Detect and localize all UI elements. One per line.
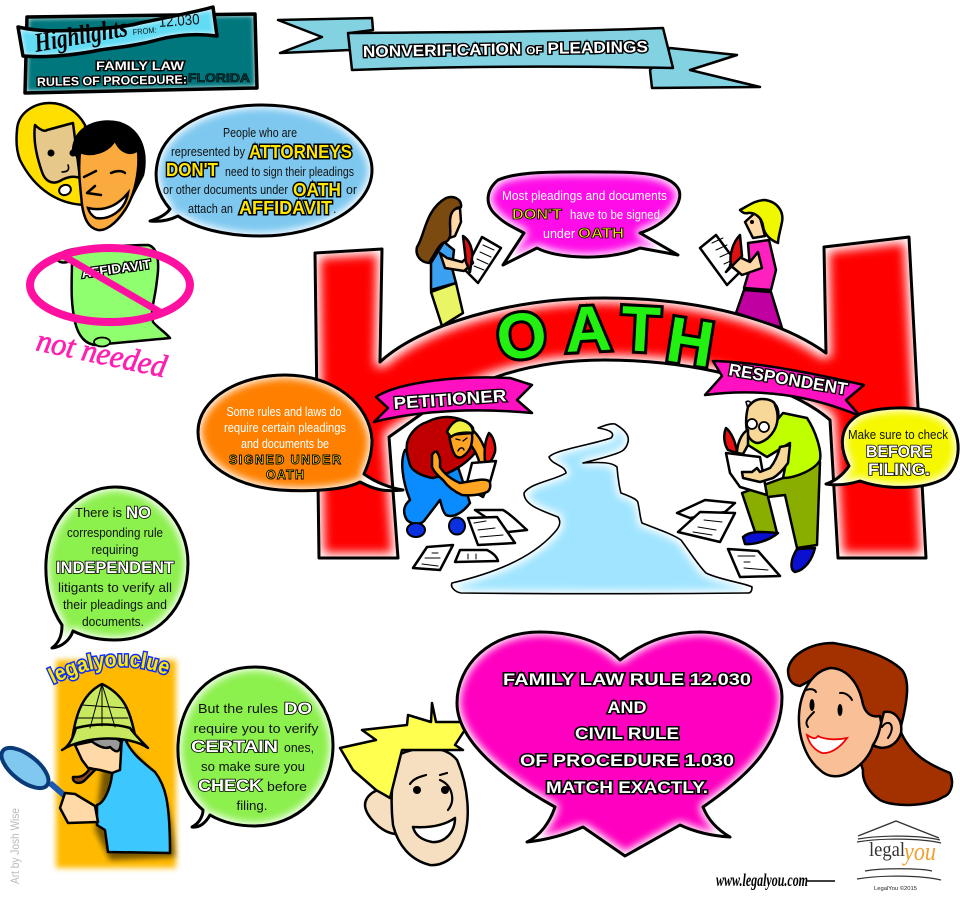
subtitle: FAMILY LAW xyxy=(96,59,185,73)
from label: FROM: xyxy=(132,26,157,37)
bubble text xyxy=(224,405,346,482)
bubble text: require certain pleadings xyxy=(224,421,346,435)
front arm xyxy=(432,451,490,495)
left woman with paper and quill xyxy=(417,197,501,326)
glasses xyxy=(747,419,757,429)
bubble text: Make sure to check xyxy=(848,428,949,442)
bubble text: But the rules xyxy=(198,702,278,716)
ear xyxy=(365,790,397,834)
eyes, nose, mouth xyxy=(413,786,421,794)
logo xyxy=(857,821,941,892)
heart callout xyxy=(457,632,782,856)
bubble text: ATTORNEYS xyxy=(249,142,352,162)
title text: NONVERIFICATION OF PLEADINGS xyxy=(363,39,648,61)
heart text: MATCH EXACTLY. xyxy=(546,778,708,797)
quill xyxy=(485,433,495,463)
bubble text: DON'T xyxy=(166,160,218,180)
bubble text: CHECK xyxy=(198,776,263,795)
bubble text: under xyxy=(543,227,575,241)
OATH arch lettering: OATH xyxy=(492,292,719,381)
bubble text: have to be signed xyxy=(570,208,660,222)
no sign ring xyxy=(30,248,190,322)
back arm xyxy=(737,430,748,454)
trousers xyxy=(742,462,820,548)
bubble text: DON'T xyxy=(512,206,562,223)
hair xyxy=(447,420,473,437)
bubble text: require you to verify xyxy=(194,722,319,736)
petitioner label: PETITIONER xyxy=(393,386,507,413)
respondent stooping with papers xyxy=(724,399,820,572)
center band xyxy=(348,28,673,70)
bubble text: NO xyxy=(126,503,151,522)
man head xyxy=(73,121,144,230)
ear xyxy=(873,712,901,748)
bubble text: corresponding rule xyxy=(67,526,163,540)
bubble text: SIGNED UNDER xyxy=(229,453,341,467)
sideburns xyxy=(746,401,779,425)
icon: crossed-out affidavit scroll xyxy=(30,245,190,384)
bubble text: AFFIDAVIT xyxy=(239,198,332,218)
shoes xyxy=(407,523,425,537)
shirt xyxy=(747,413,820,478)
bubble text: or xyxy=(346,183,357,197)
bubble text: INDEPENDENT xyxy=(56,558,175,577)
bubble text: their pleadings and xyxy=(63,598,167,612)
bubble text: Most pleadings and documents xyxy=(502,189,667,203)
right woman with paper and quill xyxy=(700,200,782,328)
base lines xyxy=(857,869,941,880)
paper xyxy=(726,453,767,495)
speech bubble: attorneys xyxy=(150,105,372,236)
coat xyxy=(97,735,170,853)
bubble text xyxy=(191,699,319,813)
scroll xyxy=(57,245,170,345)
bubble text: ones, xyxy=(284,741,314,755)
face xyxy=(75,735,122,773)
heart text: AND xyxy=(608,698,646,717)
right tail xyxy=(650,48,760,88)
quill xyxy=(724,428,737,453)
bubble text: litigants to verify all xyxy=(58,581,172,595)
not needed: not needed xyxy=(34,322,171,384)
shoes xyxy=(743,532,778,544)
bubble text: documents. xyxy=(82,615,144,629)
pipe xyxy=(73,768,95,783)
affidavit label: AFFIDAVIT xyxy=(80,256,152,281)
bubble text: People who are xyxy=(223,126,297,140)
website: www.legalyou.com xyxy=(716,870,808,890)
hand xyxy=(60,793,98,823)
Highlights script: Highlights xyxy=(31,12,130,58)
hair xyxy=(788,643,952,805)
art credit: Art by Josh Wise xyxy=(8,808,22,884)
bubble text: or other documents under xyxy=(163,183,288,197)
bubble text: Some rules and laws do xyxy=(226,405,342,419)
petitioner ribbon xyxy=(374,377,532,422)
magnifier xyxy=(0,741,72,802)
you: you xyxy=(901,837,936,866)
woman head xyxy=(16,103,90,205)
orange backdrop xyxy=(56,660,176,868)
heart text: CIVIL RULE xyxy=(575,724,679,743)
spiky hair xyxy=(340,703,470,798)
bubble text: There is xyxy=(75,506,122,520)
heart text: OF PROCEDURE 1.030 xyxy=(520,751,734,770)
legal: legal xyxy=(869,839,905,861)
legs xyxy=(402,450,470,524)
bubble text: attach an xyxy=(188,202,233,216)
left tail xyxy=(278,18,373,53)
bubble text: . xyxy=(333,202,336,216)
torso xyxy=(407,417,475,478)
heart text xyxy=(503,670,751,797)
petitioner crouching with papers xyxy=(402,417,496,537)
bubble text xyxy=(163,126,357,218)
two faces: woman and man xyxy=(16,103,144,230)
respondent ribbon xyxy=(705,360,864,416)
speech bubble: check certain ones xyxy=(178,667,333,827)
boy head xyxy=(340,703,470,865)
bubble text: filing. xyxy=(236,799,268,813)
heart text: FAMILY LAW RULE 12.030 xyxy=(503,670,751,689)
bubble text: so make sure you xyxy=(201,760,305,774)
legalyouclue detective panel xyxy=(0,650,181,873)
bubble text: need to sign their pleadings xyxy=(225,165,354,179)
back arm xyxy=(466,428,488,465)
copyright: LegalYou ©2015 xyxy=(874,885,917,892)
speech bubble: most pleadings xyxy=(488,172,680,265)
arch with pillars xyxy=(315,237,926,558)
bubble text: represented by xyxy=(171,145,246,159)
head xyxy=(449,433,472,458)
face xyxy=(799,668,885,776)
bubble text: OATH xyxy=(578,225,624,242)
river xyxy=(452,424,752,594)
bubble text: and documents be xyxy=(241,437,329,451)
title banner: Nonverification of Pleadings xyxy=(278,18,760,88)
face xyxy=(392,748,468,865)
smile xyxy=(807,735,847,753)
coat shadow xyxy=(95,745,175,860)
subtitle line 2: RULES OF PROCEDURE: xyxy=(37,72,187,89)
bubble text xyxy=(502,189,667,242)
bubble text: before xyxy=(267,780,307,794)
papers scattered on the floor xyxy=(413,500,780,577)
Florida: FLORIDA xyxy=(188,71,250,85)
speech bubble: signed under oath xyxy=(198,375,403,491)
rule number: 12.030 xyxy=(158,11,200,31)
speech bubble: independent litigants xyxy=(46,487,188,648)
woman head, right xyxy=(788,643,952,805)
bubble text: OATH xyxy=(266,468,304,482)
paper xyxy=(466,461,496,497)
legalyouclue wordmark: legalyouclue xyxy=(46,650,170,686)
teal panel xyxy=(25,14,257,93)
bubble text: requiring xyxy=(92,543,139,557)
eyes and nose xyxy=(810,699,814,711)
bubble text: OATH xyxy=(293,180,341,200)
bubble text xyxy=(56,503,175,629)
header banner: Highlights from 12.030 xyxy=(18,7,257,93)
bubble text xyxy=(848,428,949,479)
deerstalker hat xyxy=(62,684,148,750)
head xyxy=(746,399,778,443)
bubble text: FILING. xyxy=(868,460,930,479)
front arm xyxy=(742,445,790,482)
respondent label: RESPONDENT xyxy=(727,360,849,399)
ribbon xyxy=(18,7,217,57)
bubble text: BEFORE xyxy=(866,442,932,461)
speech bubble: before filing xyxy=(826,408,958,487)
bubble text: DO xyxy=(284,699,312,718)
bubble text: CERTAIN xyxy=(191,737,278,756)
roof xyxy=(858,821,939,838)
